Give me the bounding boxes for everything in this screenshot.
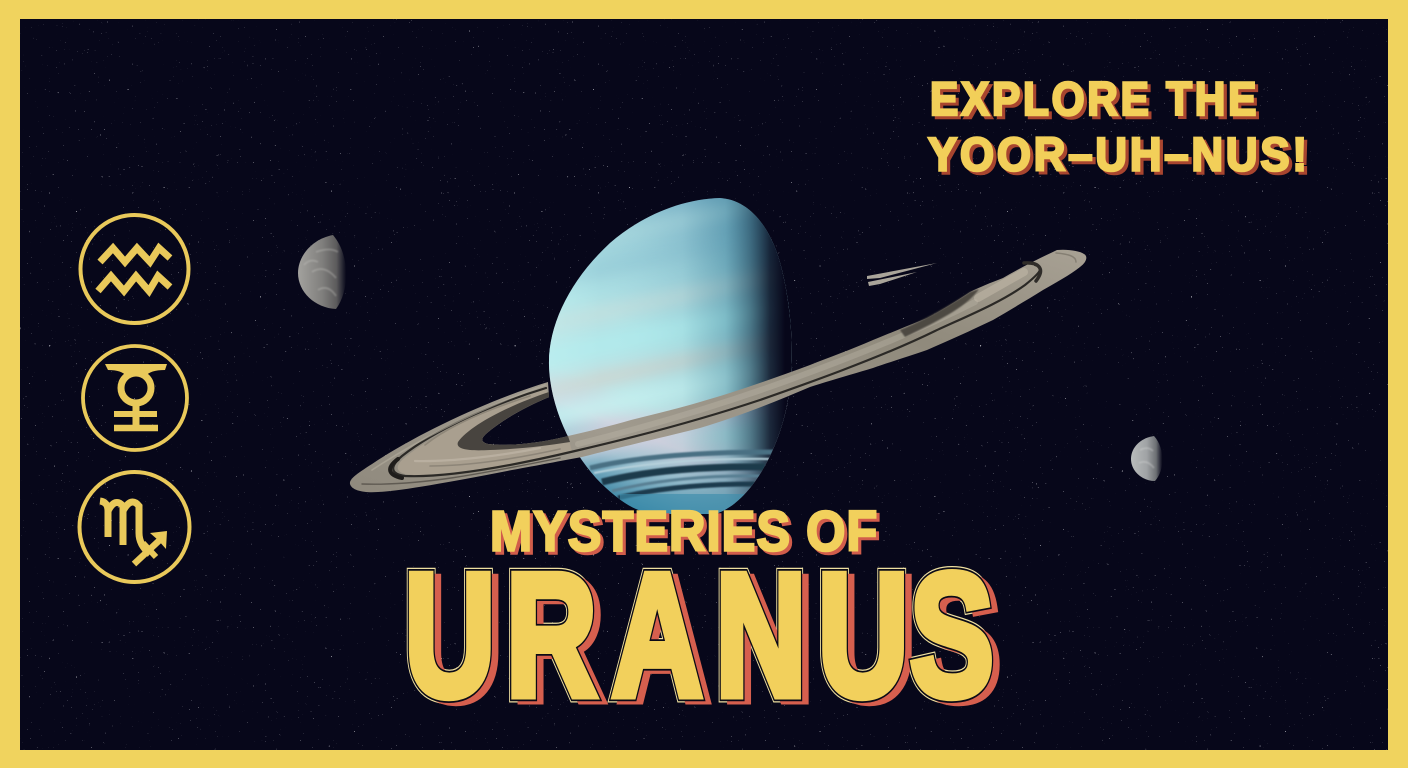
- title: Uranus: URANUS: [405, 539, 994, 733]
- tagline: explore the yoor-uh-nus: EXPLORE THE: [933, 77, 1262, 129]
- ring fragment debris: [867, 263, 937, 286]
- planet: Uranus: [548, 198, 792, 514]
- title: Uranus: URANUS: [405, 539, 994, 733]
- tagline: explore the yoor-uh-nus: YOOR–UH–NUS!: [928, 128, 1310, 181]
- ring silhouette: [350, 250, 1086, 492]
- tagline: explore the yoor-uh-nus: YOOR–UH–NUS!: [931, 131, 1313, 184]
- heading: mysteries of: MYSTERIES OF: [490, 500, 878, 563]
- title: Uranus: URANUS: [412, 543, 1001, 737]
- planet rings: [350, 250, 1086, 492]
- title: Uranus: URANUS: [405, 539, 994, 733]
- moon: right: [1131, 436, 1162, 481]
- tagline: explore the yoor-uh-nus: [928, 74, 1313, 184]
- tagline: explore the yoor-uh-nus: EXPLORE THE: [930, 74, 1259, 126]
- ring detail lines: [362, 253, 1076, 484]
- ring shadow patch, right: [900, 289, 979, 337]
- icon: mercury-style symbol: [83, 346, 187, 450]
- inner bright ring, left: [398, 389, 572, 475]
- icon: scorpio and sagittarius symbol: [80, 472, 190, 582]
- icon: aquarius symbol: [80, 215, 188, 323]
- moon: left: [298, 235, 346, 309]
- heading: mysteries of: MYSTERIES OF: [493, 503, 881, 566]
- dark inner crescent, left: [458, 392, 570, 450]
